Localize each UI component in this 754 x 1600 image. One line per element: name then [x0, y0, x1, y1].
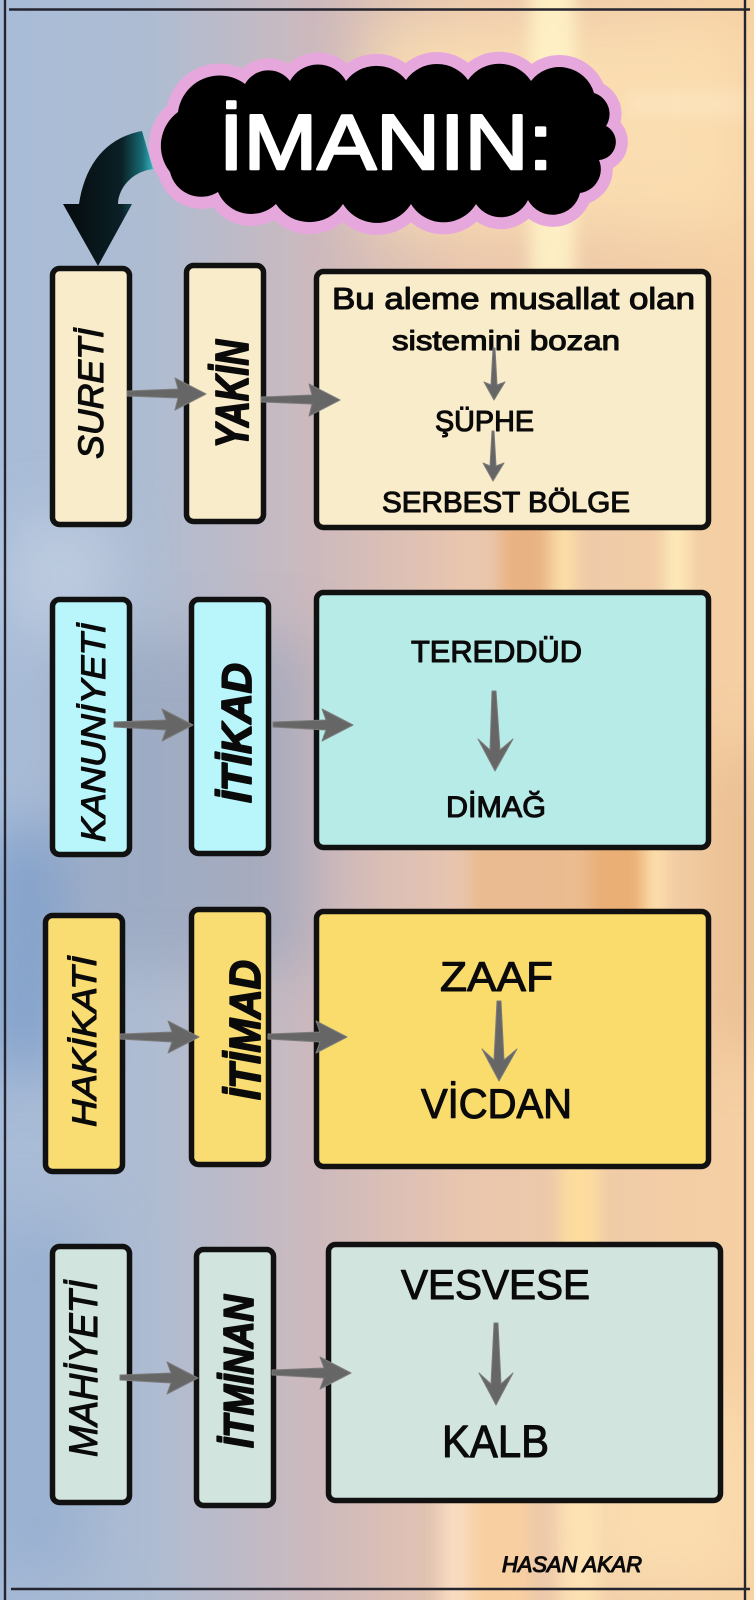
- title text: İMANIN:: [219, 98, 553, 186]
- text: vesvese: VESVESE: [401, 1261, 590, 1308]
- row 3: hakikati: [46, 910, 708, 1172]
- row 4: mahiyeti: [52, 1244, 720, 1506]
- panel: itimad explanation: [316, 912, 708, 1166]
- box: mahiyeti: [52, 1246, 130, 1502]
- row 1: sureti: [52, 266, 708, 528]
- arrow: vesvese to kalb: [479, 1323, 513, 1405]
- text: zaaf: ZAAF: [440, 953, 553, 1000]
- arrow: hakikati to itimad: [120, 1021, 199, 1053]
- arrow: down to serbest bolge: [483, 431, 504, 481]
- curved arrow: from title to first box: [63, 131, 153, 266]
- text: sistemini bozan: sistemini bozan: [392, 325, 620, 356]
- box: itimad: [192, 910, 268, 1164]
- box: itminan: [196, 1250, 274, 1506]
- arrow: yakin to panel: [261, 384, 340, 416]
- label: itimad: İTİMAD: [221, 960, 270, 1100]
- label: itikad: İTİKAD: [213, 663, 260, 803]
- label: kanuniyeti: KANUNİYETİ: [75, 622, 113, 842]
- label: sureti: SURETİ: [72, 327, 111, 459]
- box: sureti: [52, 268, 130, 524]
- panel: yakin explanation: [316, 272, 708, 528]
- arrow: itikad to panel: [273, 709, 353, 741]
- text: kalb: KALB: [442, 1416, 549, 1467]
- arrow: kanuniyeti to itikad: [114, 709, 193, 741]
- arrow: tereddud to dimag: [478, 691, 513, 771]
- arrow: itminan to panel: [272, 1357, 351, 1389]
- text: suphe: ŞÜPHE: [435, 406, 534, 438]
- label: yakin: YAKİN: [206, 339, 258, 448]
- arrow: sureti to yakin: [127, 378, 206, 410]
- box: itikad: [192, 600, 268, 854]
- label: hakikati: HAKİKATİ: [66, 955, 104, 1127]
- arrow: itimad to panel: [268, 1021, 347, 1053]
- arrow: down to suphe: [484, 348, 505, 400]
- author credit: HASAN AKAR: [502, 1552, 642, 1577]
- box: kanuniyeti: [52, 600, 130, 854]
- label: mahiyeti: MAHİYETİ: [62, 1279, 106, 1457]
- arrow: mahiyeti to itminan: [120, 1362, 198, 1394]
- cloud shape: [161, 64, 616, 223]
- box: hakikati: [46, 916, 122, 1172]
- panel: itikad explanation: [316, 592, 708, 848]
- text: bu aleme: Bu aleme musallat olan: [332, 281, 695, 316]
- label: itminan: İTMİNAN: [215, 1294, 262, 1448]
- box: yakin: [186, 266, 264, 522]
- title cloud: [161, 64, 616, 223]
- text: serbest bolge: SERBEST BÖLGE: [382, 487, 630, 519]
- text: tereddud: TEREDDÜD: [411, 634, 582, 669]
- row 2: kanuniyeti: [52, 592, 708, 854]
- text: vicdan: VİCDAN: [421, 1080, 572, 1127]
- text: dimag: DİMAĞ: [446, 791, 546, 824]
- arrow: zaaf to vicdan: [482, 1001, 517, 1081]
- panel: itminan explanation: [328, 1244, 720, 1500]
